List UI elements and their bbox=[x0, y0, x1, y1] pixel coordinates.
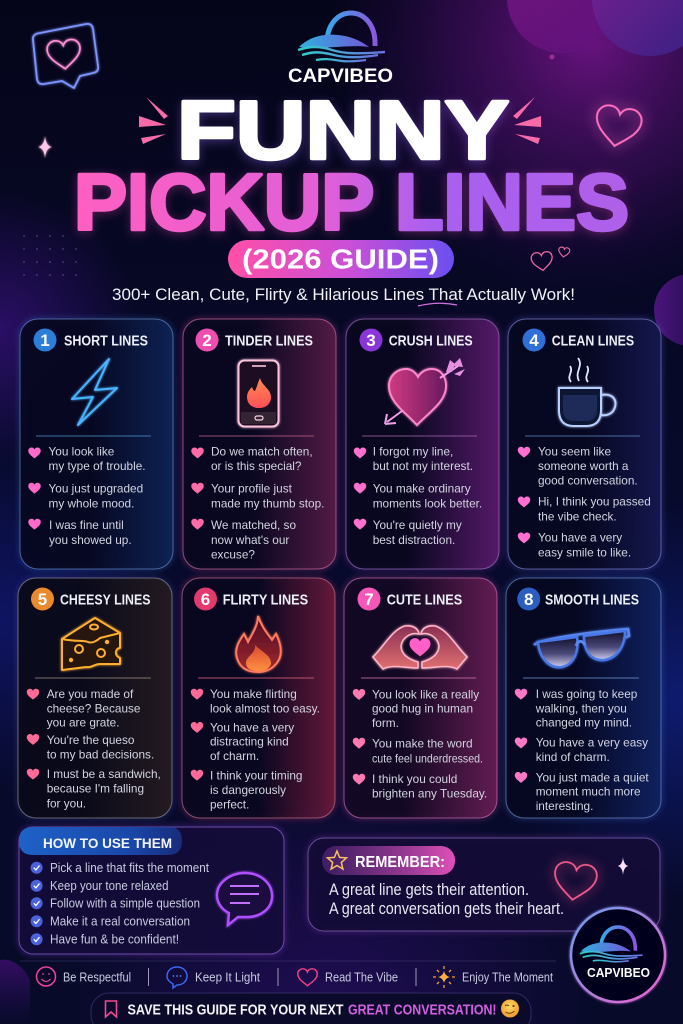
title: pickup lines: PICKUP LINES bbox=[74, 158, 629, 246]
icon: chat bubble bbox=[217, 873, 272, 925]
line: grate: Are you made of bbox=[47, 687, 134, 701]
line: walking: I was going to keep bbox=[536, 687, 638, 701]
line: mood bbox=[28, 481, 143, 510]
line: hug bbox=[353, 687, 479, 730]
panel: 5 cheesy lines bbox=[18, 578, 172, 818]
line: vibe check: Hi, I think you passed bbox=[538, 495, 651, 509]
line: quiet moment: You just made a quiet bbox=[536, 770, 649, 784]
panel: 7 cute lines bbox=[344, 578, 497, 818]
number badge 1 bbox=[34, 328, 56, 352]
number badge 4: 4 bbox=[529, 331, 539, 350]
line: moments: moments look better. bbox=[373, 496, 482, 510]
line: distraction: best distraction. bbox=[373, 533, 455, 547]
banner: save this guide bbox=[91, 993, 531, 1024]
icon: cheese bbox=[62, 618, 120, 670]
title: funny: FUNNY bbox=[177, 84, 509, 176]
tip: keep it light: Keep It Light bbox=[195, 970, 260, 984]
line: conversation: someone worth a bbox=[538, 459, 629, 473]
logo: capvibeo top bbox=[288, 13, 393, 87]
line: moments bbox=[354, 481, 482, 510]
heading: cheesy lines: CHEESY LINES bbox=[60, 592, 150, 608]
text: save message: SAVE THIS GUIDE FOR YOUR NEXT bbox=[128, 1002, 344, 1018]
line: tuesday: I think you could bbox=[372, 772, 457, 786]
tip: be respectful bbox=[36, 967, 131, 986]
line: easy charm bbox=[515, 736, 648, 764]
tip: read the vibe: Read The Vibe bbox=[325, 970, 398, 984]
panel: 3 crush lines bbox=[346, 319, 499, 569]
icon: heart with arrow bbox=[385, 358, 465, 425]
line: conversation bbox=[518, 445, 638, 488]
text: great conversation: GREAT CONVERSATION! bbox=[348, 1002, 496, 1018]
heading: smooth lines: SMOOTH LINES bbox=[545, 592, 639, 608]
checklist item 5: Have fun & be confident! bbox=[50, 932, 179, 947]
line: thumb: Your profile just bbox=[211, 481, 293, 495]
line: excuse: excuse? bbox=[211, 547, 255, 561]
line: sandwich: because I'm falling bbox=[47, 782, 144, 796]
line: sandwich: for you. bbox=[47, 796, 86, 810]
line: excuse bbox=[191, 518, 296, 561]
line: smile bbox=[518, 531, 631, 560]
tip: be respectful: Be Respectful bbox=[63, 970, 131, 984]
line: underdressed: cute feel underdressed. bbox=[372, 751, 483, 765]
heading: flirty lines: FLIRTY LINES bbox=[223, 592, 308, 608]
panel: 4 clean lines bbox=[508, 319, 661, 569]
line: smile: easy smile to like. bbox=[538, 546, 631, 560]
badge: 2026 guide: (2026 GUIDE) bbox=[242, 244, 439, 274]
heading: remember: REMEMBER: bbox=[355, 854, 445, 871]
line: hug: good hug in human bbox=[372, 702, 473, 716]
line: excuse: now what's our bbox=[211, 533, 289, 547]
number badge 2: 2 bbox=[202, 331, 212, 350]
line: grate bbox=[27, 687, 141, 730]
line: trouble bbox=[28, 445, 146, 473]
panel: 2 tinder lines bbox=[183, 319, 336, 569]
heading: crush lines: CRUSH LINES bbox=[389, 332, 473, 350]
icon: small hearts bbox=[531, 247, 570, 271]
number badge 6: 6 bbox=[201, 590, 210, 609]
line: conversation: You seem like bbox=[538, 445, 611, 459]
icon: coffee cup bbox=[559, 358, 615, 426]
line: underdressed: You make the word bbox=[372, 736, 473, 750]
decorative burst right bbox=[513, 97, 541, 144]
tip: keep it light bbox=[167, 967, 260, 988]
line: smile: You have a very bbox=[538, 531, 622, 545]
line: queso: You're the queso bbox=[47, 733, 135, 747]
number badge 5: 5 bbox=[38, 590, 47, 609]
heading: how to use them: HOW TO USE THEM bbox=[43, 835, 172, 851]
tip: enjoy the moment: Enjoy The Moment bbox=[462, 970, 553, 984]
icon: neon heart right bbox=[592, 103, 643, 150]
line: charm: You have a very bbox=[210, 720, 294, 734]
line: excuse: We matched, so bbox=[211, 518, 296, 532]
line: quiet moment: moment much more bbox=[536, 785, 641, 799]
icon: flame bbox=[236, 616, 281, 672]
line: interest: but not my interest. bbox=[373, 459, 473, 473]
checklist item 2: Keep your tone relaxed bbox=[50, 878, 168, 893]
line: walking: walking, then you bbox=[535, 701, 627, 715]
line: grate: you are grate. bbox=[47, 716, 119, 730]
line: easy charm: You have a very easy bbox=[536, 736, 648, 750]
heading: how to use them bbox=[19, 827, 182, 855]
icon: lightning bolt bbox=[72, 359, 117, 425]
panel: remember bbox=[308, 838, 660, 931]
line: sandwich bbox=[27, 767, 161, 810]
line: match: Do we match often, bbox=[211, 445, 313, 459]
line: match: or is this special? bbox=[211, 459, 302, 473]
line: timing bbox=[191, 769, 302, 811]
icon: sparkle bbox=[38, 136, 52, 158]
line: easy: look almost too easy. bbox=[210, 701, 320, 715]
panel: 6 flirty lines bbox=[182, 578, 335, 818]
icon: winking emoji bbox=[501, 1000, 519, 1018]
text: remember message: A great line gets their attention. bbox=[329, 881, 529, 899]
number badge 8: 8 bbox=[524, 590, 533, 609]
line: quiet moment bbox=[515, 770, 649, 813]
line: tuesday: brighten any Tuesday. bbox=[372, 786, 487, 800]
line: interest: I forgot my line, bbox=[373, 445, 453, 459]
icon: sparkle bbox=[618, 857, 628, 875]
heading: remember bbox=[322, 846, 455, 875]
logo badge: capvibeo bbox=[571, 908, 665, 1002]
line: sandwich: I must be a sandwich, bbox=[47, 767, 161, 781]
checklist item 1: Pick a line that fits the moment bbox=[50, 860, 209, 875]
number badge 2 bbox=[196, 328, 218, 352]
line: charm: of charm. bbox=[210, 749, 259, 763]
checklist item 4: Make it a real conversation bbox=[50, 914, 190, 929]
line: conversation: good conversation. bbox=[538, 474, 638, 488]
line: hug: form. bbox=[372, 716, 399, 730]
icon: sunglasses bbox=[534, 629, 629, 667]
number badge 6 bbox=[194, 588, 217, 610]
line: trouble: You look like bbox=[48, 445, 115, 459]
icon: neon chat bubble with heart bbox=[33, 24, 98, 88]
tip: enjoy the moment bbox=[433, 966, 553, 988]
line: easy: You make flirting bbox=[210, 687, 297, 701]
number badge 3 bbox=[360, 328, 382, 352]
icon: heart hands bbox=[373, 626, 467, 669]
icon: bookmark bbox=[106, 1001, 116, 1017]
line: walking bbox=[515, 687, 638, 730]
line: grate: cheese? Because bbox=[47, 701, 141, 715]
number badge 3: 3 bbox=[366, 331, 376, 350]
number badge 1: 1 bbox=[40, 331, 50, 350]
logo badge: capvibeo: CAPVIBEO bbox=[587, 966, 650, 980]
icon: neon heart bbox=[552, 861, 598, 903]
line: showed up: you showed up. bbox=[49, 533, 132, 547]
tip: read the vibe bbox=[298, 969, 398, 986]
line: hug: You look like a really bbox=[372, 687, 479, 701]
line: easy bbox=[191, 687, 320, 715]
heading: cute lines: CUTE LINES bbox=[387, 592, 462, 608]
line: showed up: I was fine until bbox=[49, 518, 124, 532]
line: vibe check: the vibe check. bbox=[538, 509, 617, 523]
decorative burst left bbox=[139, 97, 168, 144]
heading: short lines: SHORT LINES bbox=[64, 332, 148, 350]
line: walking: changed my mind. bbox=[536, 716, 632, 730]
line: queso: to my bad decisions. bbox=[47, 747, 154, 761]
panel: how to use them bbox=[19, 827, 284, 954]
line: charm: distracting kind bbox=[210, 735, 289, 749]
heading: tinder lines: TINDER LINES bbox=[225, 332, 313, 350]
line: moments: You make ordinary bbox=[373, 481, 471, 495]
line: trouble: my type of trouble. bbox=[48, 459, 146, 473]
decorative dot grid bbox=[23, 235, 77, 276]
panel: 1 short lines bbox=[20, 319, 173, 569]
line: match bbox=[191, 445, 313, 473]
panel: 8 smooth lines bbox=[506, 578, 661, 818]
line: thumb bbox=[191, 481, 324, 510]
line: mood: You just upgraded bbox=[48, 481, 143, 495]
line: easy charm: kind of charm. bbox=[536, 750, 610, 764]
number badge 7: 7 bbox=[364, 590, 374, 609]
line: vibe check bbox=[518, 495, 651, 523]
text: remember message: A great conversation gets their heart. bbox=[329, 900, 564, 918]
line: charm bbox=[191, 720, 294, 763]
tips row bbox=[36, 966, 553, 988]
icon: phone with flame bbox=[238, 360, 278, 426]
line: tuesday bbox=[353, 772, 487, 800]
badge: 2026 guide bbox=[228, 240, 454, 278]
number badge 7 bbox=[358, 588, 380, 610]
heading: clean lines: CLEAN LINES bbox=[552, 332, 634, 350]
line: timing: is dangerously bbox=[210, 783, 286, 797]
line: interest bbox=[354, 445, 473, 473]
checklist item 3: Follow with a simple question bbox=[50, 896, 200, 911]
line: queso bbox=[27, 733, 154, 761]
line: underdressed bbox=[353, 736, 483, 765]
line: quiet moment: interesting. bbox=[536, 799, 593, 813]
line: timing: I think your timing bbox=[210, 769, 302, 783]
text: remember message bbox=[329, 881, 564, 918]
number badge 8 bbox=[517, 588, 540, 610]
line: distraction: You're quietly my bbox=[373, 518, 462, 532]
line: showed up bbox=[28, 518, 132, 547]
line: timing: perfect. bbox=[210, 797, 249, 811]
line: thumb: made my thumb stop. bbox=[211, 496, 324, 510]
line: mood: my whole mood. bbox=[48, 496, 134, 510]
number badge 5 bbox=[31, 588, 54, 610]
logo: capvibeo top: CAPVIBEO bbox=[288, 66, 393, 87]
number badge 4 bbox=[522, 328, 546, 352]
line: distraction bbox=[354, 518, 462, 547]
subtitle: 300+ Clean, Cute, Flirty & Hilarious Lines That Actually Work! bbox=[112, 286, 575, 304]
